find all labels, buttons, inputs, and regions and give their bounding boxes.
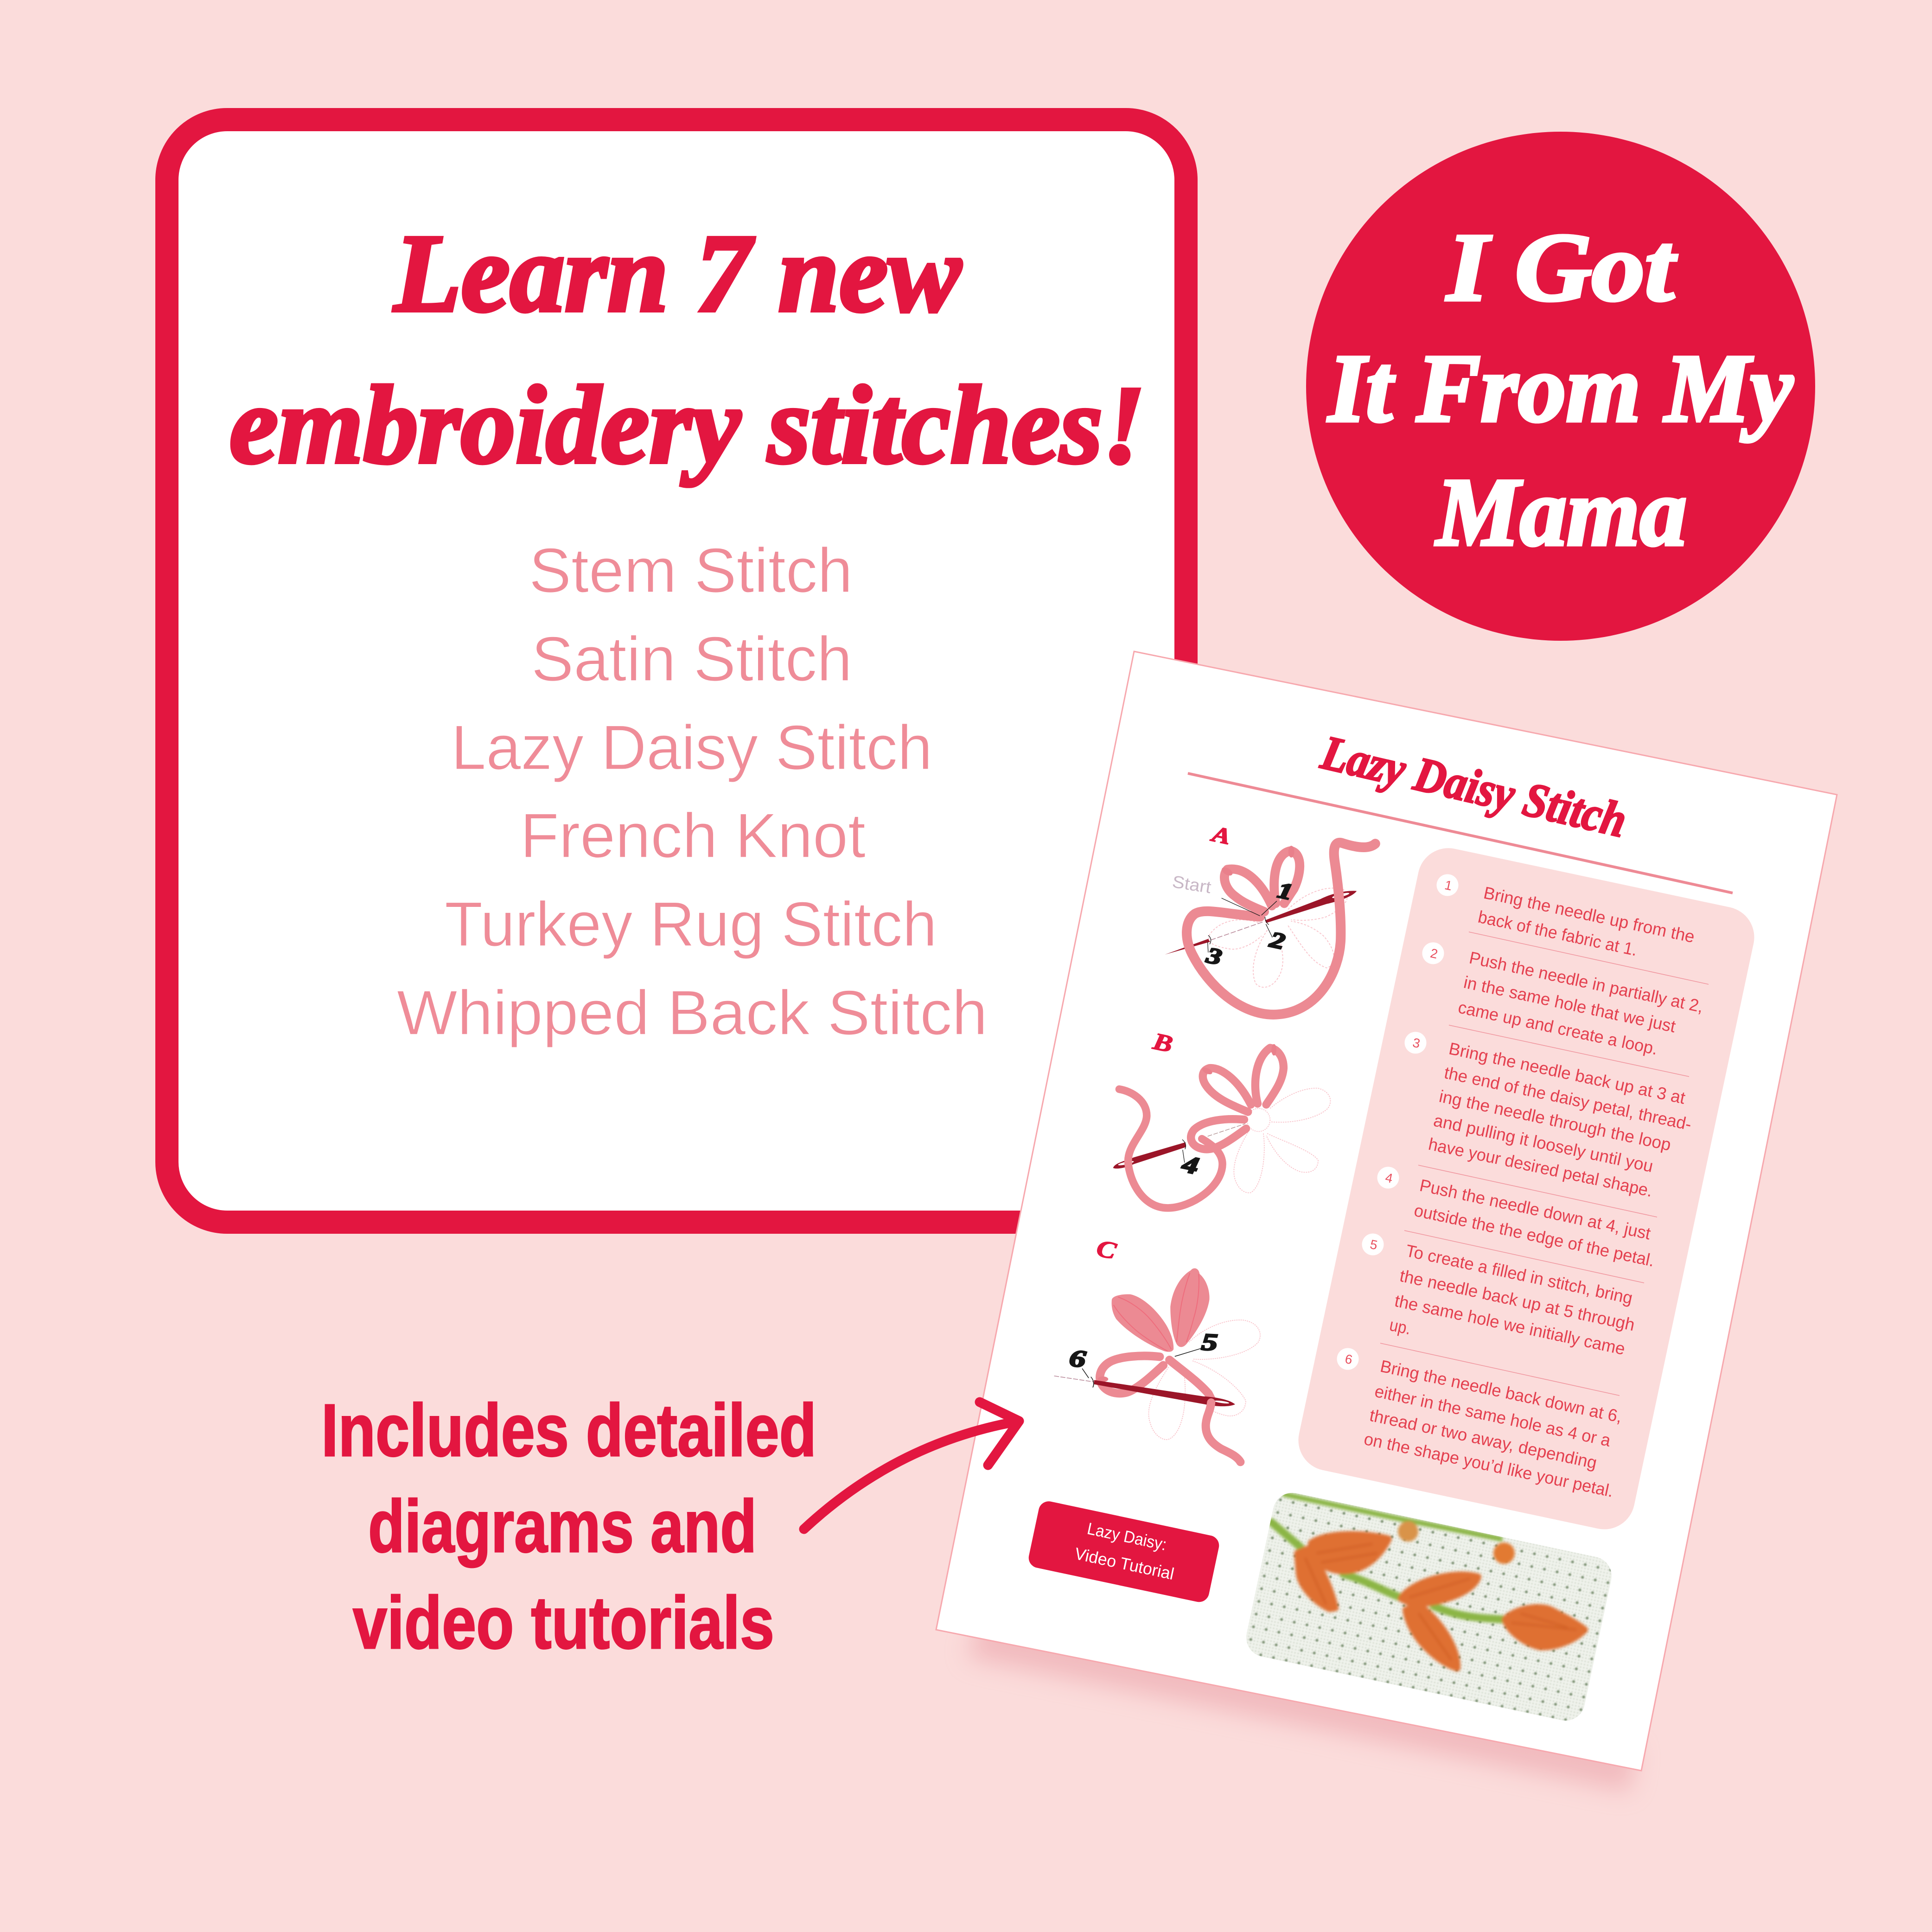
step 3 text (1427, 1039, 1693, 1200)
filled petal left (1112, 1294, 1173, 1352)
step numbers: 5 (1369, 1237, 1379, 1252)
letter B: B (1150, 1028, 1175, 1058)
step labels C: 5 (1201, 1329, 1218, 1356)
leader lines C (1082, 1348, 1201, 1388)
step 6 text: thread or two away, depending (1368, 1406, 1599, 1473)
start label: Start (1171, 872, 1212, 897)
callout text: Includes detailed (321, 1389, 816, 1472)
step numbers: 2 (1429, 946, 1439, 961)
step 3 text: ing the needle through the loop (1437, 1087, 1673, 1154)
sheet drop shadow (967, 1613, 1637, 1792)
step 3 text: the end of the daisy petal, thread- (1442, 1063, 1693, 1134)
step numbers: 6 (1344, 1352, 1354, 1367)
petal knots B (1201, 1044, 1276, 1076)
callout text: video tutorials (353, 1581, 774, 1664)
lower thread C (1206, 1403, 1240, 1462)
linen background (1246, 1493, 1612, 1721)
stitch names list: Stem Stitch (529, 535, 853, 606)
step 5 text: the same hole we initially came (1393, 1291, 1627, 1358)
step numbers: 3 (1411, 1035, 1422, 1051)
step labels A: 3 (1204, 943, 1224, 970)
step 6 text: on the shape you’d like your petal. (1362, 1429, 1615, 1501)
leader lines B (1182, 1140, 1186, 1163)
badge circle (1306, 132, 1815, 641)
stems and leaves (1271, 1494, 1585, 1668)
step 5 text: To create a filled in stitch, bring (1404, 1241, 1634, 1308)
step 6 text (1362, 1357, 1624, 1501)
callout text: diagrams and (368, 1485, 757, 1568)
stitch names list: Whipped Back Stitch (397, 977, 988, 1048)
step 5 text: the needle back up at 5 through (1398, 1266, 1637, 1334)
step 5 text: up. (1388, 1315, 1413, 1338)
photo: embroidered leaves (1246, 1493, 1612, 1721)
step numbers: 1 (1443, 878, 1454, 893)
arrow pointing to worksheet (804, 1402, 1019, 1529)
step 4 text: Push the needle down at 4, just (1418, 1176, 1652, 1243)
step 2 text: in the same hole that we just (1462, 973, 1677, 1036)
step 2 text (1456, 948, 1705, 1058)
step labels C: 6 (1068, 1345, 1087, 1373)
step labels A: 2 (1267, 927, 1287, 955)
step 3 text: have your desired petal shape. (1427, 1135, 1654, 1200)
step 2 text: Push the needle in partially at 2, (1467, 948, 1705, 1016)
diagram B (1113, 1028, 1330, 1208)
video tutorial button (1027, 1499, 1221, 1604)
heading: Learn 7 new (393, 211, 962, 335)
badge: I Got It From My Mama (1306, 132, 1815, 641)
step label 4: 4 (1180, 1150, 1201, 1180)
upper thread C (1169, 1360, 1212, 1401)
step 6 text: either in the same hole as 4 or a (1373, 1382, 1613, 1450)
loop thread C (1100, 1356, 1163, 1393)
sheet paper (936, 651, 1837, 1771)
stitch names list: Turkey Rug Stitch (445, 889, 937, 959)
heading: embroidery stitches! (230, 363, 1145, 486)
step 5 text (1388, 1241, 1637, 1358)
step labels C (1068, 1329, 1218, 1373)
step numbers: 4 (1384, 1170, 1394, 1186)
badge text: It From My (1327, 335, 1793, 442)
badge text: Mama (1435, 459, 1687, 566)
ghost petals A (1209, 888, 1347, 987)
orange leaves (1297, 1534, 1585, 1668)
diagram C (1054, 1235, 1260, 1462)
infographic canvas (155, 108, 1838, 1796)
ghost petals C (1148, 1320, 1260, 1440)
stitch names list: French Knot (520, 800, 866, 871)
filled petal top (1170, 1268, 1210, 1347)
stitch names list: Lazy Daisy Stitch (451, 712, 932, 783)
step 1 text: back of the fabric at 1. (1476, 907, 1639, 960)
diagram A (1165, 821, 1375, 1014)
panel: instructions (1293, 842, 1760, 1535)
button label (1073, 1519, 1176, 1583)
letter A: A (1209, 821, 1233, 849)
badge text: I Got (1446, 214, 1677, 321)
step 3 text: and pulling it loosely until you (1432, 1111, 1655, 1176)
needle A (1165, 891, 1357, 955)
green stems (1271, 1494, 1505, 1620)
badge text (1327, 214, 1793, 566)
panel: worksheet page (936, 651, 1837, 1771)
button label: Lazy Daisy: (1085, 1519, 1168, 1554)
step labels A (1204, 878, 1295, 970)
step 6 text: Bring the needle back down at 6, (1378, 1357, 1624, 1426)
panel: stitch list card (167, 120, 1186, 1222)
main thread B (1119, 1089, 1223, 1208)
ghost petals B (1234, 1088, 1330, 1193)
step numbers (1344, 878, 1454, 1367)
step 4 text: outside the the edge of the petal. (1412, 1201, 1656, 1270)
step number badges (1337, 874, 1459, 1370)
callout text (321, 1389, 816, 1664)
finished petals B (1203, 1048, 1283, 1112)
step labels A: 1 (1275, 878, 1295, 905)
heading (230, 211, 1145, 486)
needle B (1113, 1124, 1245, 1168)
stitch names list: Satin Stitch (531, 624, 852, 694)
french knots (1398, 1521, 1515, 1564)
finished petals A (1224, 851, 1300, 912)
sheet title: Lazy Daisy Stitch (1316, 725, 1632, 848)
petal knots A (1220, 846, 1294, 877)
loop thread B (1191, 1119, 1246, 1149)
button shape (1027, 1499, 1221, 1604)
step 2 text: came up and create a loop. (1456, 998, 1659, 1058)
leaf stitch lines (1558, 1626, 1568, 1629)
leader lines A (1208, 898, 1277, 952)
knot C (1097, 1377, 1108, 1382)
step 1 text: Bring the needle up from the (1482, 883, 1696, 946)
button label: Video Tutorial (1073, 1544, 1176, 1583)
needle C (1054, 1376, 1235, 1406)
letter C: C (1094, 1235, 1119, 1265)
separators (1380, 932, 1709, 1396)
stitch names list (397, 535, 988, 1048)
title underline (1188, 773, 1733, 893)
thread A (1187, 842, 1375, 1014)
step 3 text: Bring the needle back up at 3 at (1447, 1039, 1687, 1108)
instructions background (1293, 842, 1760, 1535)
card frame (167, 120, 1186, 1222)
